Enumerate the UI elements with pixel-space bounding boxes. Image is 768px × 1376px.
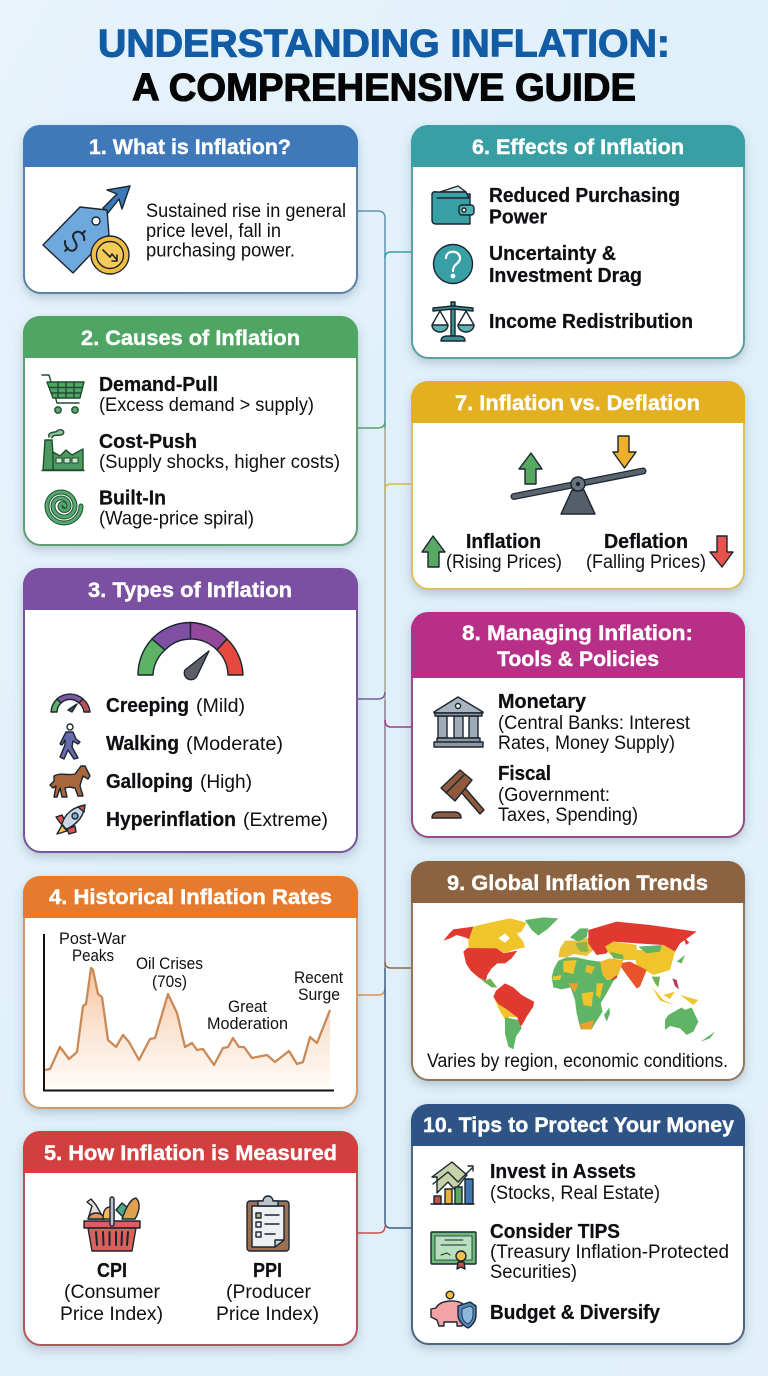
tips text — [490, 1160, 729, 1324]
panel: 4. Historical Inflation Rates — [23, 876, 358, 1108]
tips text: Consider TIPS — [490, 1220, 620, 1243]
PPI label — [216, 1259, 319, 1325]
types list: (Moderate) — [186, 734, 283, 755]
title: A COMPREHENSIVE GUIDE — [132, 66, 636, 110]
monetary and fiscal text: (Government: — [498, 785, 610, 806]
heading: 7. Inflation vs. Deflation — [455, 391, 700, 415]
effects list — [489, 184, 693, 333]
monetary and fiscal text: (Central Banks: Interest — [498, 713, 691, 734]
line chart: Moderation — [207, 1015, 288, 1033]
tips text: (Treasury Inflation-Protected — [490, 1242, 729, 1263]
CPI label: (Consumer — [64, 1282, 161, 1303]
panel: 3. Types of Inflation — [23, 568, 358, 852]
effects list: Investment Drag — [489, 264, 642, 287]
icon: wallet — [432, 186, 474, 224]
description: price level, fall in — [146, 221, 281, 242]
cost-push and demand-pull text: Cost-Push — [99, 430, 197, 453]
effects list: Uncertainty & — [489, 242, 616, 265]
cost-push and demand-pull text: (Excess demand > supply) — [99, 395, 314, 416]
line chart: (70s) — [152, 973, 187, 991]
effects list: Power — [489, 206, 547, 228]
icon: price tag with arrow and coin — [43, 186, 130, 274]
cost-push and demand-pull text: Built-In — [99, 486, 166, 510]
caption: Varies by region, economic conditions. — [427, 1051, 728, 1072]
deflation label with down arrow: Deflation — [604, 530, 688, 553]
CPI label: Price Index) — [60, 1304, 163, 1325]
icon: shopping basket — [84, 1197, 140, 1251]
icon: gavel — [432, 770, 484, 818]
monetary and fiscal text: Taxes, Spending) — [498, 805, 638, 826]
icon: factory — [42, 430, 84, 470]
inflation label with up arrow — [422, 530, 562, 573]
panel: 6. Effects of Inflation — [411, 125, 745, 358]
heading — [462, 621, 693, 671]
monetary and fiscal text — [498, 690, 691, 826]
description — [146, 201, 346, 262]
icon: horse — [50, 766, 90, 797]
types list: (High) — [200, 772, 252, 793]
icon: piggy bank with shield — [431, 1291, 476, 1328]
cost-push and demand-pull text — [99, 373, 340, 530]
heading: Tools & Policies — [497, 647, 659, 671]
icon: clipboard — [247, 1196, 289, 1251]
types list: (Extreme) — [243, 810, 328, 831]
title: UNDERSTANDING INFLATION: — [98, 22, 670, 66]
cost-push and demand-pull text: Demand-Pull — [99, 373, 218, 396]
types list — [106, 694, 328, 831]
panel: 10. Tips to Protect Your Money — [411, 1104, 745, 1344]
deflation label with down arrow: (Falling Prices) — [586, 552, 706, 573]
types list: (Mild) — [196, 696, 245, 717]
PPI label: (Producer — [226, 1282, 312, 1303]
icon: small gauge — [51, 694, 90, 712]
cost-push and demand-pull text: (Wage-price spiral) — [99, 508, 254, 530]
line chart: Great — [228, 998, 267, 1016]
title — [98, 22, 670, 110]
line chart: Peaks — [72, 947, 114, 965]
icon: balance scales — [432, 302, 474, 341]
heading: 5. How Inflation is Measured — [44, 1141, 337, 1165]
panel: 1. What is Inflation — [23, 125, 358, 293]
line chart — [44, 930, 343, 1090]
monetary and fiscal text: Rates, Money Supply) — [498, 733, 675, 754]
icon: bank — [434, 697, 483, 747]
panel: 5. How Inflation is Measured — [23, 1131, 358, 1345]
PPI label: Price Index) — [216, 1304, 319, 1325]
effects list: Income Redistribution — [489, 310, 693, 333]
monetary and fiscal text: Monetary — [498, 690, 587, 713]
types list: Galloping — [106, 770, 193, 793]
panel: 7. Inflation vs. Deflation — [411, 381, 745, 589]
line chart: Oil Crises — [136, 955, 203, 973]
types list: Hyperinflation — [106, 808, 236, 831]
CPI label: CPI — [97, 1259, 127, 1282]
gauge chart — [138, 622, 243, 680]
PPI label: PPI — [253, 1259, 282, 1282]
icon: certificate — [431, 1232, 476, 1269]
line chart: Post-War — [59, 930, 126, 948]
heading: 1. What is Inflation? — [89, 135, 291, 159]
description: Sustained rise in general — [146, 201, 346, 222]
inflation label with up arrow: Inflation — [466, 530, 541, 553]
connectors between panels — [358, 211, 411, 1233]
icon: wage-price spiral — [47, 492, 81, 523]
monetary and fiscal text: Fiscal — [498, 762, 551, 785]
heading: 9. Global Inflation Trends — [447, 871, 708, 895]
line chart: Surge — [298, 986, 340, 1004]
icon: shopping cart — [42, 375, 84, 413]
heading: 10. Tips to Protect Your Money — [423, 1113, 734, 1137]
panel: 2. Causes of Inflation — [23, 316, 358, 545]
panel: 8. Managing Inflation — [411, 612, 745, 837]
heading: 4. Historical Inflation Rates — [49, 885, 332, 909]
line chart: Recent — [294, 969, 343, 987]
deflation label with down arrow — [586, 530, 733, 573]
cost-push and demand-pull text: (Supply shocks, higher costs) — [99, 452, 340, 473]
icon: question mark — [434, 244, 472, 284]
icon: rocket — [56, 805, 85, 834]
description: purchasing power. — [146, 240, 295, 262]
world map — [443, 917, 715, 1049]
heading: 6. Effects of Inflation — [472, 135, 684, 159]
types list: Walking — [106, 732, 179, 755]
heading: 8. Managing Inflation: — [462, 621, 693, 645]
icon: seesaw with arrows — [514, 436, 643, 514]
CPI label — [60, 1259, 163, 1325]
effects list: Reduced Purchasing — [489, 184, 680, 207]
heading: 3. Types of Inflation — [88, 578, 292, 602]
tips text: Budget & Diversify — [490, 1301, 661, 1324]
inflation label with up arrow: (Rising Prices) — [446, 552, 562, 573]
panel: 9. Global Inflation Trends — [411, 861, 745, 1080]
heading: 2. Causes of Inflation — [81, 326, 300, 350]
tips text: (Stocks, Real Estate) — [490, 1183, 660, 1204]
tips text: Invest in Assets — [490, 1160, 636, 1183]
icon: walking person — [60, 724, 80, 759]
types list: Creeping — [106, 694, 189, 717]
tips text: Securities) — [490, 1262, 577, 1283]
icon: house and chart — [431, 1162, 474, 1204]
